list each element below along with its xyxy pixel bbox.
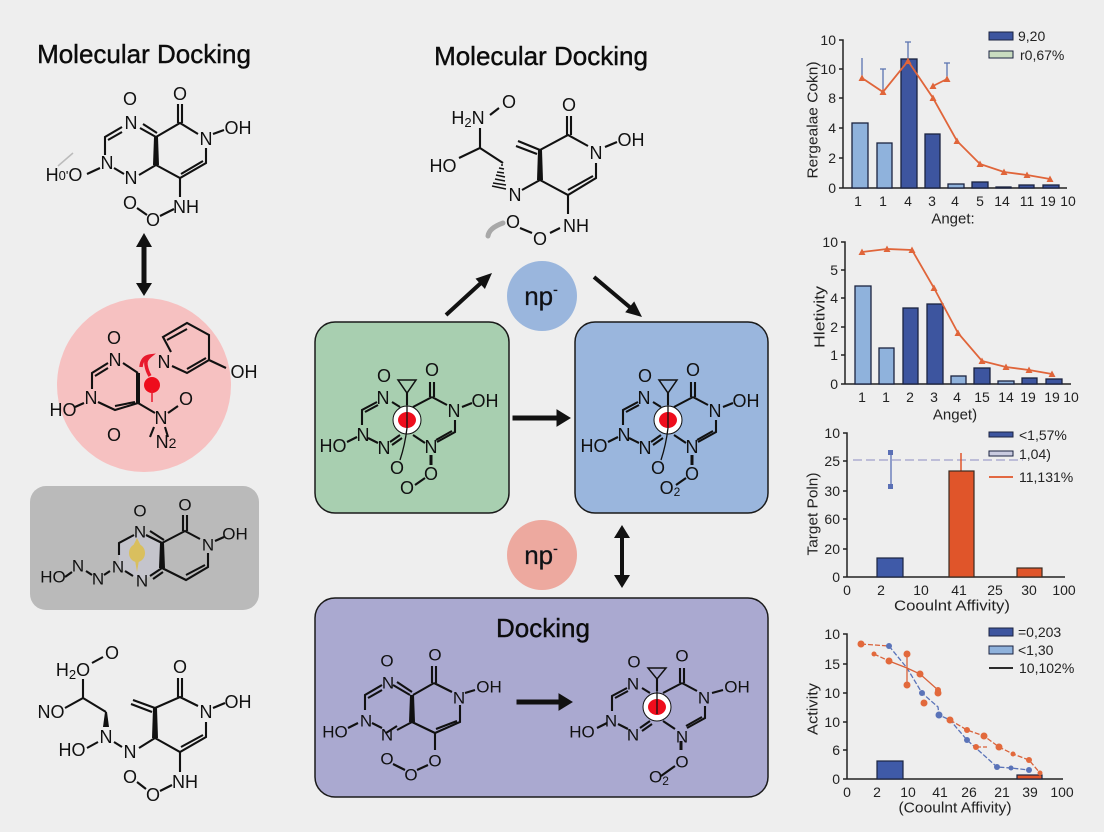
chart: scatter activity chart: =0,203	[1018, 624, 1061, 640]
chart: top bar chart: 19	[1040, 193, 1056, 209]
chart: top bar chart: 4	[828, 120, 836, 136]
molecule: top center structure: O	[506, 212, 520, 232]
chart: scatter activity chart: 2	[873, 784, 881, 800]
chart: third bar chart: Cooulnt Affivity)	[894, 598, 1010, 614]
panel: blue molecule: N	[618, 425, 630, 445]
panel: green molecule: O	[377, 366, 391, 386]
chart: second bar chart: 1	[882, 389, 890, 405]
molecule: bottom left structure: O	[123, 767, 137, 787]
chart: scatter activity chart: (Cooulnt Affivity)	[898, 800, 1012, 816]
chart: second bar chart: 14	[998, 389, 1014, 405]
molecule: bottom left structure: NH	[172, 772, 198, 792]
arrow: blue panel to docking panel	[614, 525, 630, 588]
chart: top bar chart: 3	[928, 193, 936, 209]
molecule: top left structure	[46, 84, 252, 230]
chart: second bar chart: 15	[974, 389, 990, 405]
molecule: top left structure: O	[173, 84, 187, 104]
molecule: bottom left structure: 2	[69, 666, 76, 682]
chart: top bar chart: 2	[828, 150, 836, 166]
chart: third bar chart: 20	[824, 541, 840, 557]
chart: third bar chart: <1,57%	[1019, 427, 1067, 443]
molecule: bottom left structure: O	[146, 785, 160, 805]
molecule: docking right: O	[649, 768, 662, 786]
panel: gray molecule: N	[134, 522, 146, 542]
panel: red circle molecule: HO	[50, 400, 76, 420]
panel: blue molecule: OH	[732, 391, 760, 411]
panel: gray molecule	[30, 486, 259, 610]
chart: top bar chart: 9,20	[1018, 28, 1045, 44]
panel: green molecule: O	[400, 478, 414, 498]
molecule: docking right	[569, 646, 750, 788]
chart: second bar chart: 2	[906, 389, 914, 405]
chart: second bar chart: 10	[1063, 389, 1079, 405]
chart: third bar chart: 0	[843, 582, 851, 598]
panel: blue molecule: N	[638, 388, 650, 408]
chart: third bar chart: 60	[824, 511, 840, 527]
molecule: docking right: O	[627, 652, 641, 672]
molecule: top center structure: N	[508, 185, 522, 205]
panel: green molecule: N	[378, 438, 390, 458]
chart: second bar chart: 19	[1044, 389, 1060, 405]
chart: top bar chart	[804, 28, 1076, 228]
molecule: top center structure: NH	[563, 216, 589, 236]
panel: gray molecule: O	[133, 502, 147, 520]
panel: green molecule: O	[424, 464, 438, 484]
molecule: bottom left structure: NO	[38, 702, 64, 722]
molecule: bottom left structure: OH	[224, 692, 252, 712]
molecule: top center structure: H	[451, 108, 464, 128]
molecule: docking right: O	[675, 752, 689, 772]
chart: second bar chart: 3	[930, 389, 938, 405]
panel: docking	[315, 598, 768, 797]
panel: green molecule	[315, 322, 509, 513]
panel: blue molecule: O	[638, 366, 652, 386]
chart: top bar chart: 5	[976, 193, 984, 209]
chart: second bar chart: 1	[858, 389, 866, 405]
molecule: top left structure: NH	[173, 197, 199, 217]
molecule: bottom left structure: O	[173, 657, 187, 677]
chart: second bar chart: 4	[953, 389, 961, 405]
molecule: top left structure: H0'O	[46, 165, 82, 185]
molecule: bottom left structure	[38, 643, 252, 805]
chart: scatter activity chart: 10	[824, 626, 840, 642]
panel: gray molecule: O	[178, 496, 192, 514]
chart: third bar chart: 0	[832, 569, 840, 585]
chart: top bar chart: 11	[1020, 193, 1034, 209]
arrow: docking reaction	[517, 694, 572, 710]
badge: salmon np circle: np	[524, 540, 553, 570]
molecule: bottom left structure: N	[200, 702, 212, 722]
chart: third bar chart	[804, 425, 1076, 614]
panel: gray molecule: N	[202, 536, 214, 554]
chart: third bar chart: 100	[1052, 582, 1076, 598]
molecule: bottom left structure: N	[124, 742, 136, 762]
molecule: top center structure: O	[502, 92, 516, 112]
chart: second bar chart: Anget)	[933, 406, 977, 424]
chart: third bar chart: 10	[913, 582, 929, 598]
panel: red circle molecule: N	[156, 432, 169, 452]
molecule: docking right: N	[627, 726, 639, 744]
chart: top bar chart: 0	[828, 180, 836, 196]
chart: scatter activity chart: 10	[900, 784, 916, 800]
panel: gray molecule: HO	[40, 568, 66, 586]
molecule: docking left: OH	[476, 678, 502, 696]
panel: blue molecule: N	[708, 401, 722, 421]
chart: scatter activity chart: Activity	[804, 682, 822, 735]
title: left Molecular Docking: Molecular Docking	[37, 39, 251, 69]
panel: blue molecule: O	[686, 360, 700, 380]
molecule: top left structure: O	[123, 89, 137, 109]
molecule: docking right: 2	[662, 774, 669, 788]
panel: blue molecule: O	[660, 478, 674, 498]
panel: red circle molecule: N	[108, 350, 122, 370]
badge: salmon np circle: -	[553, 540, 558, 556]
panel: blue molecule: HO	[580, 436, 608, 456]
molecule: top left structure: O	[123, 193, 137, 213]
panel: green molecule: N	[424, 437, 438, 457]
heading: docking: Docking	[496, 613, 590, 643]
chart: scatter activity chart: 10,102%	[1019, 660, 1074, 676]
panel: red circle molecule: N	[84, 388, 98, 408]
chart: top bar chart: 14	[994, 193, 1010, 209]
molecule: top center structure: HO	[430, 156, 456, 176]
chart: top bar chart: 1	[854, 193, 862, 209]
chart: scatter activity chart: 10	[824, 714, 840, 730]
molecule: docking left: O	[380, 652, 394, 670]
panel: green molecule: N	[448, 401, 460, 421]
molecule: top center structure	[430, 92, 644, 249]
chart: scatter activity chart: 0	[832, 771, 840, 787]
chart: scatter activity chart: <1,30	[1018, 642, 1054, 658]
panel: red circle molecule	[50, 298, 258, 472]
chart: top bar chart: 10	[820, 32, 836, 48]
molecule: docking left: O	[428, 752, 442, 770]
chart: scatter activity chart: 15	[824, 656, 840, 672]
molecule: docking right: N	[698, 688, 710, 708]
panel: red circle molecule: O	[107, 328, 121, 348]
molecule: docking right: O	[675, 646, 689, 666]
chart: scatter activity chart	[804, 624, 1074, 816]
chart: top bar chart: 1	[879, 193, 887, 209]
molecule: docking left: O	[380, 750, 394, 768]
molecule: top left structure: OH	[224, 118, 252, 138]
chart: third bar chart: 10	[824, 425, 840, 441]
arrow: top molecule to blue panel	[594, 277, 642, 317]
molecule: docking left: O	[428, 646, 442, 664]
molecule: docking left: N	[360, 712, 372, 730]
chart: third bar chart: 30	[1021, 582, 1037, 598]
arrow: green panel to blue panel	[513, 410, 570, 426]
molecule: docking right: N	[676, 728, 688, 746]
panel: green molecule: O	[425, 360, 439, 380]
molecule: top center structure: N	[590, 143, 602, 163]
panel: gray molecule: OH	[222, 524, 248, 544]
chart: second bar chart	[812, 234, 1079, 424]
panel: gray molecule: N	[112, 558, 124, 576]
molecule: docking left: N	[453, 688, 465, 708]
molecule: top center structure: 2	[464, 114, 472, 130]
chart: third bar chart: 11,131%	[1019, 469, 1073, 485]
molecule: docking left: HO	[322, 722, 348, 742]
molecule: docking right: N	[627, 674, 639, 694]
chart: second bar chart: 10	[822, 234, 838, 250]
molecule: bottom left structure: O	[76, 660, 90, 680]
molecule: bottom left structure: O	[105, 643, 119, 663]
chart: second bar chart: 4	[830, 290, 838, 306]
molecule: top center structure: N	[472, 108, 485, 128]
chart: second bar chart: 19	[1020, 389, 1036, 405]
molecule: top center structure: O	[533, 229, 547, 249]
y axis label: Rergealae Cokn)	[804, 62, 822, 178]
chart: second bar chart: 5	[830, 262, 838, 278]
title: center Molecular Docking: Molecular Docking	[434, 41, 648, 71]
panel: green molecule: O	[390, 458, 404, 478]
panel: blue molecule: N	[638, 438, 652, 458]
badge: blue np circle	[507, 261, 577, 331]
panel: blue molecule: O	[685, 464, 699, 484]
molecule: bottom left structure: N	[100, 727, 112, 747]
panel: gray molecule: N	[92, 570, 104, 588]
chart: third bar chart: 2	[877, 582, 885, 598]
molecule: top center structure: O	[562, 95, 576, 115]
panel: blue molecule: N	[686, 437, 698, 457]
chart: second bar chart: Hletivity	[812, 285, 828, 348]
chart: top bar chart: 10	[1060, 193, 1076, 209]
chart: top bar chart: 10	[820, 61, 836, 77]
chart: top bar chart: r0,67%	[1020, 47, 1064, 63]
badge: blue np circle: np	[524, 281, 553, 311]
chart: top bar chart: 4	[951, 193, 959, 209]
chart: top bar chart: 8	[828, 90, 836, 106]
panel: red circle molecule: N	[154, 408, 168, 428]
molecule: docking right: OH	[724, 678, 750, 696]
molecule: top left structure: N	[200, 129, 212, 149]
chart: third bar chart: 1,04)	[1019, 446, 1051, 462]
molecule: top left structure: N	[100, 153, 114, 173]
panel: gray molecule: N	[72, 556, 84, 576]
chart: scatter activity chart: 21	[994, 784, 1010, 800]
molecule: docking left: N	[382, 674, 394, 692]
panel: green molecule: N	[376, 388, 390, 408]
chart: scatter activity chart: 41	[932, 784, 948, 800]
chart: scatter activity chart: 39	[1022, 784, 1038, 800]
molecule: docking left: N	[381, 726, 393, 744]
badge: blue np circle: -	[553, 281, 558, 297]
panel: blue molecule: O	[651, 458, 665, 478]
chart: third bar chart: 30	[824, 483, 840, 499]
molecule: docking left	[322, 646, 502, 784]
panel: green molecule: N	[356, 425, 370, 445]
molecule: docking right: HO	[569, 722, 595, 742]
chart: third bar chart: Target Poln)	[804, 472, 822, 556]
chart: scatter activity chart: 100	[1050, 784, 1074, 800]
panel: green molecule: HO	[320, 436, 346, 456]
molecule: top left structure: O	[146, 210, 160, 230]
molecule: bottom left structure: HO	[58, 740, 86, 760]
chart: third bar chart: 25	[987, 582, 1003, 598]
molecule: top center structure: OH	[618, 130, 644, 150]
panel: red circle molecule: O	[179, 389, 193, 409]
molecule: top left structure: N	[124, 168, 138, 188]
chart: third bar chart: 25	[824, 453, 840, 469]
panel: red circle molecule: 2	[169, 435, 177, 451]
chart: scatter activity chart: 26	[961, 784, 977, 800]
chart: top bar chart: Anget:	[931, 210, 975, 228]
arrow: left vertical double arrow	[136, 233, 152, 296]
chart: scatter activity chart: 0	[843, 784, 851, 800]
panel: red circle molecule: O	[107, 425, 121, 445]
badge: salmon np circle	[507, 520, 577, 590]
molecule: bottom left structure: H	[56, 660, 69, 680]
chart: second bar chart: 1	[830, 347, 838, 363]
molecule: docking left: O	[404, 766, 418, 784]
panel: blue molecule: 2	[674, 485, 681, 499]
arrow: green panel to top molecule	[446, 273, 492, 315]
molecule: top left structure: N	[124, 113, 138, 133]
chart: second bar chart: 2	[830, 319, 838, 335]
chart: second bar chart: 0	[830, 376, 838, 392]
panel: red circle molecule: N	[158, 352, 170, 372]
panel: gray molecule: N	[136, 572, 148, 590]
chart: scatter activity chart: 10	[824, 685, 840, 701]
panel: green molecule: OH	[472, 391, 498, 411]
molecule: docking right: N	[605, 712, 617, 730]
panel: red circle molecule: OH	[230, 362, 258, 382]
chart: top bar chart: 4	[904, 193, 912, 209]
panel: blue molecule	[575, 322, 768, 513]
chart: scatter activity chart: 6	[832, 742, 840, 758]
chart: third bar chart: 41	[951, 582, 967, 598]
